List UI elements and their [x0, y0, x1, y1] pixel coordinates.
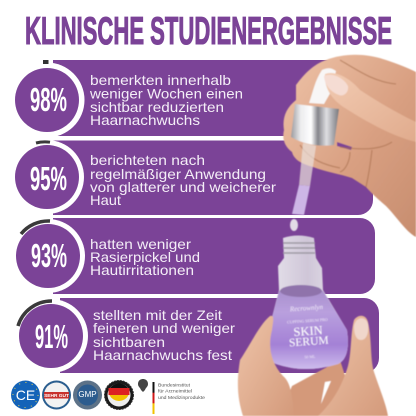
band 2 [53, 140, 373, 215]
badge: GMP: GMP [78, 390, 97, 399]
hand [283, 55, 416, 237]
percent 98: 98% [30, 81, 67, 118]
ring 2 [10, 140, 84, 214]
text 2 [90, 153, 276, 208]
text 3: Hautirritationen [90, 263, 194, 278]
dropper bulb [309, 68, 336, 104]
badge: GMP [73, 380, 102, 410]
fingers behind [280, 360, 358, 416]
serum [267, 288, 348, 369]
right thumb [318, 316, 388, 416]
badge: Sehr gut: SEHR GUT [44, 393, 69, 399]
text 4: feineren und weniger [93, 321, 235, 336]
ring 1 [10, 60, 84, 138]
text 2: Haut [90, 193, 121, 208]
badge: Germany [104, 380, 134, 410]
thumb nail [354, 318, 368, 340]
glass pipette [299, 143, 316, 186]
badge: CE [11, 380, 40, 410]
flag bar [152, 382, 154, 414]
label: SKIN [293, 323, 323, 339]
certification badges [11, 379, 205, 414]
band 3 [53, 218, 375, 294]
text 3: Rasierpickel und [90, 250, 200, 265]
label [286, 303, 330, 360]
thumb over bulb [325, 73, 416, 142]
text 4 [93, 308, 235, 363]
panel: stat 91% [14, 298, 379, 373]
text 1: sichtbar reduzierten [90, 100, 224, 115]
text 2: berichteten nach [90, 153, 205, 168]
text 3 [90, 237, 200, 278]
drop [290, 219, 298, 231]
text 2: regelmäßiger Anwendung [90, 167, 266, 182]
ring 4 [14, 299, 88, 373]
photo: lower hand holding bottle [238, 236, 388, 416]
label: 50 ML [304, 354, 316, 359]
percent 95: 95% [30, 160, 67, 197]
band 4 [60, 298, 379, 373]
label: SERUM [289, 335, 329, 349]
text 1: weniger Wochen einen [89, 86, 243, 102]
icon: federal eagle [138, 379, 148, 392]
text 4: stellten mit der Zeit [93, 308, 222, 323]
institute name: für Arzneimittel [158, 388, 192, 394]
panel: stat 93% [11, 218, 375, 294]
band 1 [53, 60, 345, 136]
text 3: hatten weniger [90, 237, 191, 252]
institute name: und Medizinprodukte [158, 395, 205, 400]
text 4: sichtbaren [93, 335, 165, 350]
left finger [238, 316, 294, 416]
hand creases [300, 60, 396, 187]
badge: Sehr gut [42, 380, 71, 410]
bottle [267, 236, 348, 369]
ring 3 [11, 219, 85, 293]
text 1: Haarnachwuchs [90, 113, 200, 128]
gap between fingers [321, 381, 331, 404]
finger gap showing band [337, 142, 352, 150]
silver collar [291, 104, 339, 146]
percent 93: 93% [31, 237, 67, 274]
neck rings [283, 243, 315, 253]
nail [324, 75, 348, 95]
panel: stat 95% [10, 140, 373, 215]
institute name [158, 382, 205, 400]
liquid surface [280, 285, 322, 297]
text 4: Haarnachwuchs fest [93, 348, 232, 363]
pipette liquid [292, 185, 310, 215]
text 1 [89, 73, 243, 128]
text 2: von glatterer und weicherer [90, 180, 276, 195]
photo: upper hand holding dropper [283, 55, 416, 237]
label: Recrownlyn [289, 303, 324, 313]
panel: stat 91%: 91% [35, 318, 68, 355]
panel: stat 98% [10, 60, 345, 138]
institute name: Bundesinstitut [158, 382, 191, 388]
text 1: bemerkten innerhalb [90, 73, 231, 88]
label: CUPPING SERUM PRO [287, 317, 328, 325]
badge: CE: CE [16, 387, 35, 403]
